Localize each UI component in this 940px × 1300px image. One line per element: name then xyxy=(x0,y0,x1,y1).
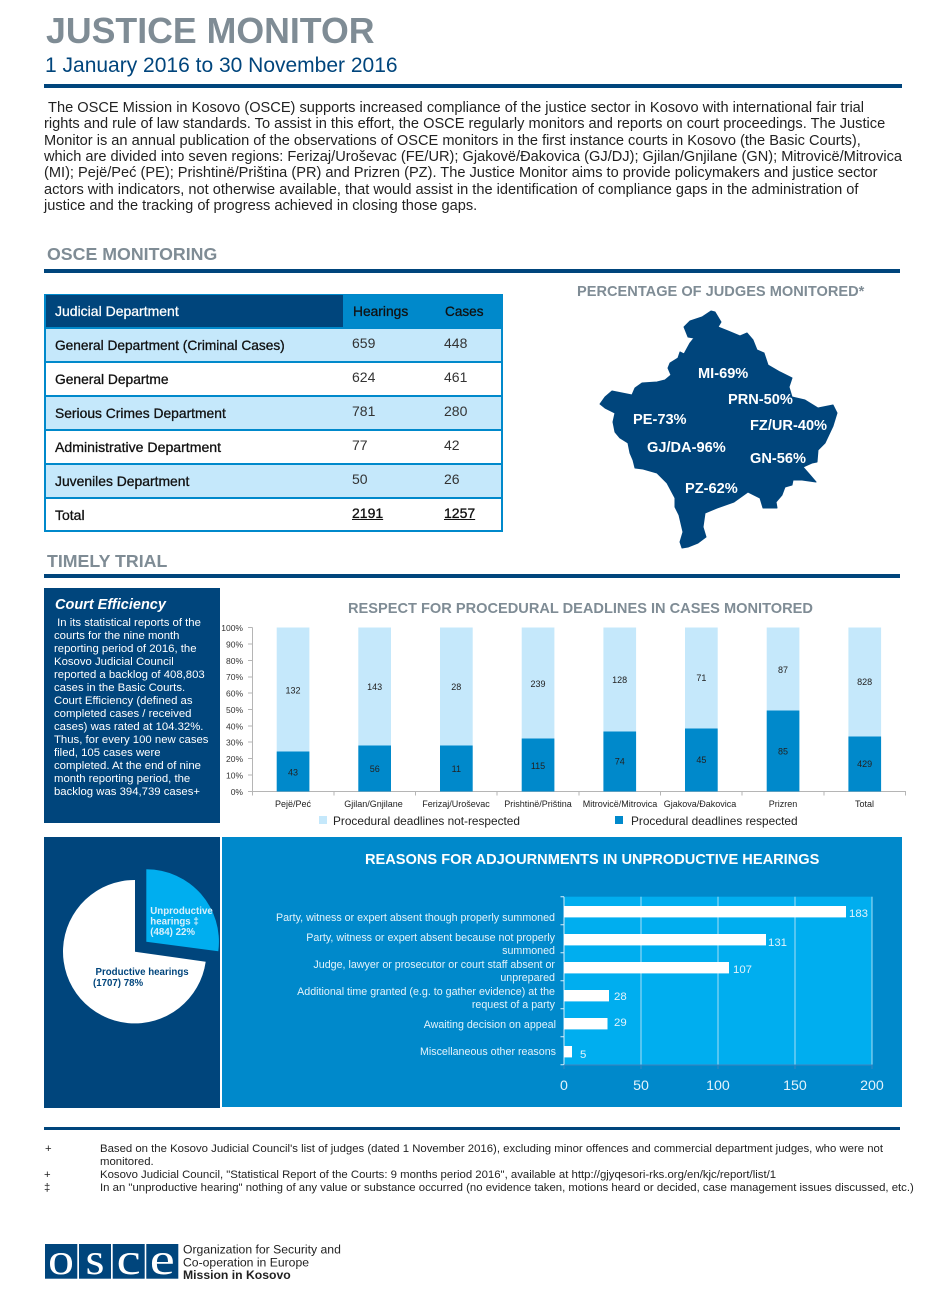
logo: OSCE: Mission in Kosovo xyxy=(183,1268,291,1282)
panel: court efficiency xyxy=(44,588,220,823)
bar chart: procedural deadlines: 128 xyxy=(612,675,627,685)
logo: OSCE: Organization for Security and xyxy=(183,1242,341,1256)
bar chart: procedural deadlines: Prizren xyxy=(769,799,797,809)
bar chart: procedural deadlines: 11 xyxy=(452,764,461,774)
panel text: month reporting period, the xyxy=(54,773,190,785)
footnotes: Based on the Kosovo Judicial Council's list of judges (dated 1 November 2016), excluding minor offences and commercial department judges, who were not xyxy=(100,1143,883,1155)
footnotes: ‡ xyxy=(44,1182,50,1194)
bar chart: reasons for adjournments: 28 xyxy=(614,991,627,1003)
bar chart: procedural deadlines: 74 xyxy=(615,756,625,766)
panel text: reporting period of 2016, the xyxy=(54,643,197,655)
bar chart: procedural deadlines: Total xyxy=(855,799,874,809)
panel text: backlog was 394,739 cases+ xyxy=(54,786,200,798)
bar chart: reasons for adjournments: Additional time granted (e.g. to gather evidence) at the xyxy=(297,986,555,998)
panel text: reported a backlog of 408,803 xyxy=(54,669,205,681)
logo: OSCE: s xyxy=(86,1235,104,1284)
bar chart: procedural deadlines: Pejë/Peć xyxy=(275,799,312,809)
bar chart: reasons for adjournments: Miscellaneous other reasons xyxy=(420,1046,556,1058)
logo: OSCE: e xyxy=(150,1235,175,1284)
table: judicial departments: Hearings xyxy=(353,304,408,319)
map: Kosovo regions: MI-69% xyxy=(698,366,748,382)
bar chart: reasons for adjournments: 200 xyxy=(860,1078,884,1094)
heading: percentage of judges monitored: PERCENTAGE OF JUDGES MONITORED* xyxy=(577,284,864,300)
bar chart: procedural deadlines: 60% xyxy=(226,688,243,698)
bar chart: reasons for adjournments: 0 xyxy=(560,1078,568,1094)
intro paragraph: rights and rule of law standards. To assist in this effort, the OSCE regularly monitors and reports on court proceedings. The Justice xyxy=(44,116,885,132)
bar chart: procedural deadlines: 90% xyxy=(226,640,243,650)
panel: productive vs unproductive pie xyxy=(44,837,220,1108)
table: judicial departments: 781 xyxy=(352,403,375,419)
bar chart: procedural deadlines: 115 xyxy=(531,761,545,771)
bar chart: procedural deadlines: 28 xyxy=(451,682,461,692)
bar chart: procedural deadlines: 30% xyxy=(226,738,243,748)
table: judicial departments: 77 xyxy=(352,437,368,453)
map: Kosovo regions: FZ/UR-40% xyxy=(750,418,827,434)
map: Kosovo regions: PZ-62% xyxy=(685,481,738,497)
logo: OSCE: o xyxy=(48,1235,74,1284)
table: judicial departments: Administrative Department xyxy=(55,439,221,455)
table: judicial departments: Juveniles Department xyxy=(55,473,189,489)
intro paragraph: Monitor is an annual publication of the observations of OSCE monitors in the first instance courts in Kosovo (the Basic Courts), xyxy=(44,133,861,149)
bar chart: reasons for adjournments: 29 xyxy=(614,1017,627,1029)
panel heading: Court Efficiency xyxy=(55,597,166,613)
bar chart: reasons for adjournments: Party, witness or expert absent though properly summoned xyxy=(276,912,555,924)
map: Kosovo regions: PRN-50% xyxy=(728,392,793,408)
subtitle: date range: 1 January 2016 to 30 November 2016 xyxy=(45,54,398,77)
panel: reasons for adjournments xyxy=(222,837,902,1107)
bar chart: procedural deadlines: Ferizaj/Uroševac xyxy=(422,799,490,809)
bar chart: procedural deadlines: 87 xyxy=(778,665,788,675)
bar chart: reasons for adjournments: 5 xyxy=(580,1049,586,1061)
pie chart: hearings: Unproductive xyxy=(150,906,213,917)
legend: deadlines xyxy=(319,814,798,828)
bar chart: reasons for adjournments: unprepared xyxy=(500,972,555,984)
table: judicial departments: Cases xyxy=(445,304,484,319)
table: judicial departments: Judicial Department xyxy=(55,303,179,319)
table: judicial departments: 659 xyxy=(352,335,375,351)
bar chart: procedural deadlines: 50% xyxy=(226,705,243,715)
footnotes xyxy=(44,1143,914,1194)
panel text: cases) was rated at 104.32%. xyxy=(54,721,203,733)
legend: deadlines: Procedural deadlines respected xyxy=(631,814,798,828)
pie chart: hearings: hearings ‡ xyxy=(150,916,199,928)
bar chart: procedural deadlines: 80% xyxy=(226,656,243,666)
panel text: Court Efficiency (defined as xyxy=(54,695,193,707)
bar chart: procedural deadlines: 10% xyxy=(226,770,243,780)
bar chart: reasons for adjournments: 150 xyxy=(783,1078,807,1094)
panel text: Thus, for every 100 new cases xyxy=(54,734,208,746)
panel text: filed, 105 cases were xyxy=(54,747,161,759)
panel text: completed. At the end of nine xyxy=(54,760,201,772)
table: judicial departments: 280 xyxy=(444,403,467,419)
heading: timely trial: TIMELY TRIAL xyxy=(47,551,167,571)
table: judicial departments xyxy=(44,294,503,532)
map: Kosovo regions: GN-56% xyxy=(750,451,806,467)
bar chart: procedural deadlines: 828 xyxy=(857,677,872,687)
panel text: completed cases / received xyxy=(54,708,191,720)
footnotes: monitored. xyxy=(100,1156,154,1168)
bar chart: reasons for adjournments: 131 xyxy=(768,937,787,949)
table: judicial departments: 624 xyxy=(352,369,375,385)
bar chart: reasons for adjournments: 50 xyxy=(633,1078,649,1094)
bar chart: procedural deadlines: 20% xyxy=(226,754,243,764)
pie chart: hearings: (484) 22% xyxy=(150,927,195,938)
legend: deadlines: Procedural deadlines not-respected xyxy=(333,814,520,828)
bar chart: procedural deadlines: 40% xyxy=(226,722,243,732)
table: judicial departments: Total xyxy=(55,507,85,523)
bar chart: procedural deadlines: Gjilan/Gnjilane xyxy=(344,799,403,809)
bar chart: procedural deadlines: 100% xyxy=(221,623,243,633)
pie chart: hearings: Productive hearings xyxy=(96,967,189,978)
panel text: In its statistical reports of the xyxy=(57,617,201,629)
logo: OSCE: c xyxy=(117,1235,141,1284)
table: judicial departments: General Department (Criminal Cases) xyxy=(55,338,285,353)
title: JUSTICE MONITOR xyxy=(46,11,374,51)
panel text xyxy=(54,617,208,798)
table: judicial departments: General Departme xyxy=(55,372,168,387)
bar chart: procedural deadlines: 71 xyxy=(696,673,706,683)
bar chart: reasons for adjournments: Judge, lawyer or prosecutor or court staff absent or xyxy=(313,959,555,971)
intro paragraph: The OSCE Mission in Kosovo (OSCE) supports increased compliance of the justice sector in Kosovo with international fair trial xyxy=(48,100,864,116)
map: Kosovo regions: PE-73% xyxy=(633,412,687,428)
heading: procedural deadlines: RESPECT FOR PROCEDURAL DEADLINES IN CASES MONITORED xyxy=(348,601,813,617)
intro paragraph: which are divided into seven regions: Ferizaj/Uroševac (FE/UR); Gjakovë/Đakovica (GJ/DJ); Gjilan/Gnjilane (GN); Mitrovicë/Mitrovica xyxy=(44,149,902,165)
table: judicial departments: 42 xyxy=(444,437,460,453)
bar chart: procedural deadlines: Gjakova/Đakovica xyxy=(664,799,736,809)
footnotes: + xyxy=(45,1143,52,1155)
footnotes: Kosovo Judicial Council, "Statistical Report of the Courts: 9 months period 2016", available at http://gjyqesori-rks.org/en/kjc/report/list/1 xyxy=(100,1169,776,1181)
bar chart: procedural deadlines: 43 xyxy=(288,768,298,778)
bar chart: procedural deadlines: Prishtinë/Priština xyxy=(504,799,572,809)
heading: reasons for adjournments: REASONS FOR ADJOURNMENTS IN UNPRODUCTIVE HEARINGS xyxy=(365,852,819,868)
intro paragraph: justice and the tracking of progress achieved in closing those gaps. xyxy=(44,198,477,214)
intro paragraph: (MI); Pejë/Peć (PE); Prishtinë/Priština (PR) and Prizren (PZ). The Justice Monitor aims to provide policymakers and justice sector xyxy=(44,165,877,181)
bar chart: procedural deadlines: 85 xyxy=(778,746,788,756)
bar chart: procedural deadlines: Mitrovicë/Mitrovica xyxy=(583,799,657,809)
table: judicial departments: 461 xyxy=(444,369,467,385)
bar chart: reasons for adjournments: Awaiting decision on appeal xyxy=(424,1019,556,1031)
table: judicial departments: 26 xyxy=(444,471,460,487)
bar chart: procedural deadlines: 132 xyxy=(285,686,301,696)
map: Kosovo regions: GJ/DA-96% xyxy=(647,440,726,456)
bar chart: reasons for adjournments: request of a party xyxy=(472,999,556,1011)
bar chart: procedural deadlines: 56 xyxy=(370,764,380,774)
footnotes: + xyxy=(44,1169,51,1181)
bar chart: procedural deadlines: 45 xyxy=(696,755,706,765)
bar chart: reasons for adjournments: summoned xyxy=(502,945,555,957)
table: judicial departments: 1257 xyxy=(444,505,475,521)
panel text: cases in the Basic Courts. xyxy=(54,682,185,694)
bar chart: reasons for adjournments: Party, witness or expert absent because not properly xyxy=(306,932,556,944)
intro paragraph xyxy=(44,100,902,214)
panel text: Kosovo Judicial Council xyxy=(54,656,174,668)
bar chart: reasons for adjournments: 183 xyxy=(849,908,868,920)
footnotes: In an "unproductive hearing" nothing of any value or substance occurred (no evidence taken, motions heard or decided, case management issues discussed, etc.) xyxy=(100,1182,914,1194)
table: judicial departments: 2191 xyxy=(352,505,383,521)
heading: OSCE monitoring: OSCE MONITORING xyxy=(47,244,217,264)
bar chart: procedural deadlines: 70% xyxy=(226,672,243,682)
pie chart: hearings: (1707) 78% xyxy=(93,978,143,989)
panel text: courts for the nine month xyxy=(54,630,179,642)
table: judicial departments: 50 xyxy=(352,471,368,487)
bar chart: procedural deadlines: 429 xyxy=(857,759,872,769)
bar chart: procedural deadlines: 143 xyxy=(367,682,382,692)
bar chart: reasons for adjournments: 100 xyxy=(706,1078,730,1094)
table: judicial departments: Serious Crimes Department xyxy=(55,405,226,421)
logo: OSCE: Co-operation in Europe xyxy=(183,1255,309,1269)
intro paragraph: actors with indicators, not otherwise available, that would assist in the identification of compliance gaps in the administration of xyxy=(44,182,858,198)
table: judicial departments: 448 xyxy=(444,335,467,351)
bar chart: procedural deadlines: 0% xyxy=(231,787,243,797)
bar chart: reasons for adjournments: 107 xyxy=(733,964,752,976)
bar chart: procedural deadlines: 239 xyxy=(530,679,546,689)
